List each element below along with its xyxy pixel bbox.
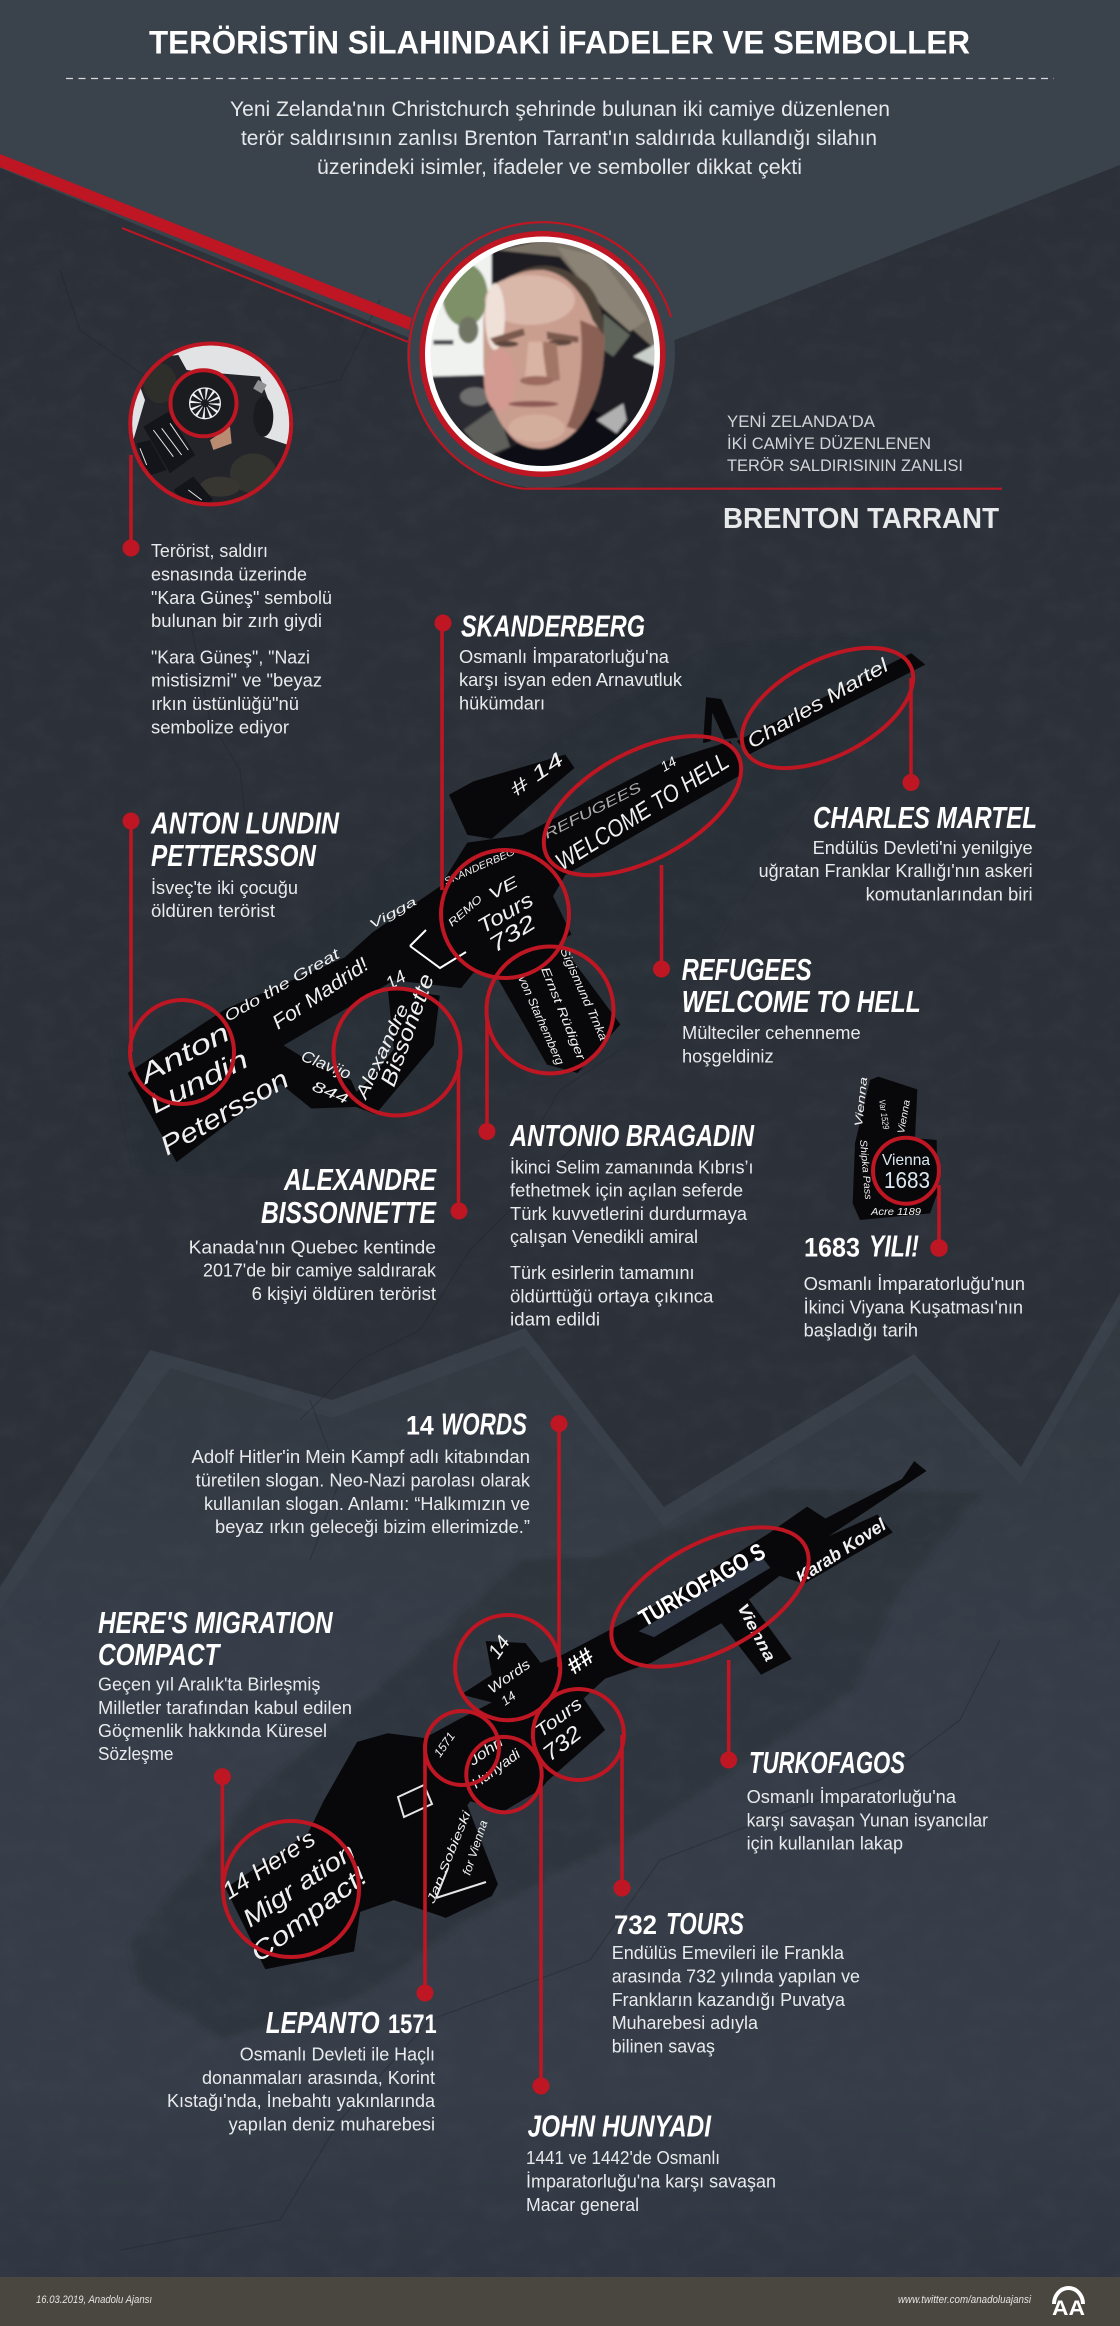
suspect caption	[727, 412, 963, 475]
marker: Tours 732	[533, 1689, 624, 1780]
rifle magazine: 1683	[884, 1167, 930, 1193]
lower rifle inscriptions: John	[465, 1734, 506, 1770]
rifle inscriptions: Clavijo	[299, 1048, 353, 1083]
callout: Anton Lundin Pettersson: İsveç'te iki çocuğu	[151, 878, 298, 898]
rifle inscriptions: VE	[486, 874, 522, 904]
background: wall cracks	[60, 270, 1000, 2250]
callout: Anton Lundin Pettersson: öldüren terörist	[151, 901, 275, 921]
marker: 14 Words	[455, 1615, 560, 1720]
rifle inscriptions: Anton	[132, 1017, 234, 1091]
callout: Alexandre Bissonnette: 6 kişiyi öldüren terörist	[252, 1284, 436, 1304]
rifle inscriptions: # 14	[506, 749, 568, 801]
callout: Antonio Bragadin: fethetmek için açılan seferde	[510, 1181, 743, 1201]
marker: Lepanto	[425, 1711, 499, 1785]
callout: Lepanto 1571: Osmanlı Devleti ile Haçlı	[240, 2045, 435, 2065]
red diagonal bar	[0, 154, 412, 331]
callout: Antonio Bragadin: idam edildi	[510, 1310, 600, 1330]
callout: Lepanto 1571: Kıstağı'nda, İnebahtı yakınlarında	[167, 2091, 436, 2111]
callout: 732 Tours: 732	[614, 1910, 657, 1940]
callout: Charles Martel: Endülüs Devleti'ni yenilgiye	[813, 838, 1033, 858]
intro text: üzerindeki isimler, ifadeler ve semboller dikkat çekti	[317, 156, 802, 179]
background: brush stroke behind lower rifle	[131, 1489, 982, 2038]
intro text: Yeni Zelanda'nın Christchurch şehrinde bulunan iki camiye düzenlenen	[230, 98, 890, 121]
callout: 1683 Yılı: 1683	[804, 1233, 860, 1263]
callout: 14 Words: 14	[406, 1410, 434, 1440]
rifle inscriptions: Vigga	[367, 894, 419, 932]
lower rifle inscriptions: for Vienna	[460, 1818, 491, 1877]
callout: 1683 Yılı: İkinci Viyana Kuşatması'nın	[804, 1297, 1023, 1317]
upper rifle	[128, 623, 932, 1162]
callout: Here's Migration Compact	[98, 1605, 352, 1889]
rifle inscriptions: For Madrid!	[268, 954, 373, 1034]
suspect caption: İKİ CAMİYE DÜZENLENEN	[727, 434, 931, 453]
callout: Lepanto 1571: donanmaları arasında, Korint	[202, 2068, 435, 2088]
rifle inscriptions: 14	[658, 753, 679, 775]
callout: Charles Martel: CHARLES MARTEL	[813, 800, 1037, 835]
marker: Migration Compact	[223, 1821, 359, 1957]
callout: Alexandre Bissonnette: BISSONNETTE	[261, 1195, 437, 1230]
lower rifle inscriptions: Tours	[531, 1693, 586, 1741]
rifle inscriptions: 14	[382, 966, 409, 993]
callout: 732 Tours: Muharebesi adıyla	[612, 2013, 759, 2033]
footer social link: www.twitter.com/anadoluajansi	[898, 2294, 1031, 2306]
portrait halo	[407, 220, 675, 488]
callout: Turkofagos: Osmanlı İmparatorluğu'na	[747, 1787, 957, 1807]
rifle inscriptions: REMO	[446, 893, 485, 929]
callout: Here's Migration Compact: HERE'S MIGRATION	[98, 1605, 333, 1640]
callout: 732 Tours: arasında 732 yılında yapılan ve	[612, 1967, 860, 1987]
callout: 1683 Yılı: YILI!	[869, 1229, 919, 1264]
lower rifle inscriptions: Migr ation	[238, 1838, 360, 1933]
rifle inscriptions: 844	[310, 1078, 351, 1108]
callout: 14 Words: kullanılan slogan. Anlamı: “Halkımızın ve	[204, 1494, 530, 1514]
rifle magazine	[853, 1076, 939, 1220]
text: black sun note: mistisizmi" ve "beyaz	[151, 670, 322, 690]
text: black sun note: sembolize ediyor	[151, 718, 289, 738]
intro text: terör saldırısının zanlısı Brenton Tarrant'ın saldırıda kullandığı silahın	[241, 127, 877, 150]
lower rifle inscriptions: Karab Kovel	[792, 1514, 890, 1587]
rifle inscriptions: WELCOME TO HELL	[551, 748, 734, 876]
callout: 732 Tours: bilinen savaş	[612, 2037, 715, 2057]
lower rifle inscriptions: Jan Sobieski	[423, 1809, 474, 1906]
suspect caption: YENİ ZELANDA'DA	[727, 412, 876, 431]
callout: Here's Migration Compact: COMPACT	[98, 1637, 222, 1672]
rifle inscriptions: Tours	[474, 888, 538, 938]
callout: John Hunyadi: Macar general	[526, 2195, 639, 2215]
callout: 14 Words: türetilen slogan. Neo-Nazi parolası olarak	[196, 1470, 531, 1490]
callout: Refugees Welcome to Hell: Mülteciler cehenneme	[682, 1023, 861, 1043]
text: black sun note: ırkın üstünlüğü"nü	[151, 694, 299, 714]
callout: Antonio Bragadin: Türk esirlerin tamamını	[510, 1263, 694, 1283]
rifle magazine: Acre 1189	[870, 1207, 921, 1218]
callout: 732 Tours	[612, 1735, 860, 2057]
rifle inscriptions: Sigismund Trnka	[557, 946, 611, 1043]
rifle inscriptions: Petersson	[155, 1064, 294, 1161]
callout: 1683 Yılı: başladığı tarih	[804, 1321, 918, 1341]
title: TERÖRİSTİN SİLAHINDAKİ İFADELER VE SEMBOLLER	[149, 24, 970, 60]
text: black sun note	[151, 541, 332, 738]
rifle inscriptions: Lundin	[144, 1044, 253, 1119]
callout: Antonio Bragadin	[478, 1020, 754, 1330]
rifle inscriptions: Odo the Great	[222, 945, 344, 1025]
lower rifle	[218, 1461, 926, 1969]
callout: Charles Martel	[759, 678, 1037, 904]
callout: Here's Migration Compact: Göçmenlik hakkında Küresel	[98, 1721, 327, 1741]
lower rifle inscriptions: 732	[538, 1720, 586, 1766]
callout: Antonio Bragadin: Türk kuvvetlerini durdurmaya	[510, 1204, 748, 1224]
rifle inscriptions: Ernst Rüdiger	[538, 965, 589, 1063]
callout: Charles Martel: uğratan Franklar Krallığı'nın askeri	[759, 861, 1033, 881]
callout: Alexandre Bissonnette: Kanada'nın Quebec kentinde	[189, 1237, 436, 1257]
lower rifle inscriptions: TURKOFAGO S	[634, 1538, 770, 1632]
connector: armour note	[122, 455, 140, 556]
callout: 14 Words: beyaz ırkın geleceği bizim ellerimizde.”	[215, 1517, 530, 1537]
portrait arc and underline	[409, 222, 1002, 489]
lower rifle inscriptions: Words	[485, 1656, 533, 1696]
lower rifle inscriptions: 14	[484, 1632, 515, 1663]
callout: Anton Lundin Pettersson	[122, 806, 339, 1052]
callout: 14 Words	[192, 1406, 568, 1667]
icon: agency logo: AA	[1052, 2297, 1085, 2320]
callout: Lepanto 1571	[167, 1750, 437, 2135]
marker: John Hunyadi	[466, 1737, 542, 1812]
callout: Alexandre Bissonnette: 2017'de bir camiye saldırarak	[203, 1261, 437, 1281]
rifle magazine: Var 1529	[877, 1099, 891, 1130]
background: brush stroke behind upper rifle	[112, 628, 945, 1176]
text: black sun note: "Kara Güneş", "Nazi	[151, 648, 310, 668]
footer bar	[0, 2277, 1120, 2326]
rifle magazine: Shipka Pass	[857, 1139, 873, 1200]
callout: John Hunyadi: 1441 ve 1442'de Osmanlı	[526, 2148, 720, 2168]
title divider	[66, 78, 1054, 80]
callout: Skanderberg: hükümdarı	[459, 694, 545, 714]
footer date and source: 16.03.2019, Anadolu Ajansı	[36, 2294, 152, 2306]
callout: John Hunyadi: İmparatorluğu'na karşı savaşan	[526, 2172, 776, 2192]
callout: Skanderberg	[434, 608, 683, 890]
callout: Skanderberg: SKANDERBERG	[461, 608, 645, 644]
callout: Lepanto 1571: LEPANTO	[266, 2005, 380, 2040]
callout: Turkofagos: karşı savaşan Yunan isyancılar	[747, 1810, 988, 1830]
photo: armour with black sun patch	[127, 340, 293, 510]
marker: Refugees Welcome	[522, 707, 763, 904]
callout: John Hunyadi	[526, 1780, 776, 2215]
rifle magazine: Vienna	[853, 1076, 870, 1127]
callout: Antonio Bragadin: ANTONIO BRAGADIN	[509, 1118, 754, 1153]
suspect name: BRENTON TARRANT	[723, 503, 999, 535]
callout: 1683 Yılı: Osmanlı İmparatorluğu'nun	[804, 1274, 1025, 1294]
rifle inscriptions: Charles Martel	[744, 654, 893, 753]
lower rifle inscriptions: Compact!	[245, 1861, 373, 1968]
rifle magazine: Vienna	[882, 1152, 930, 1169]
rifle magazine: Vienna	[896, 1099, 913, 1135]
callout: 732 Tours: Endülüs Emevileri ile Frankla	[612, 1943, 845, 1963]
rifle inscriptions	[132, 654, 893, 1161]
rifle inscriptions: von Starhemberg	[515, 974, 567, 1067]
text: black sun note: bulunan bir zırh giydi	[151, 611, 322, 631]
callout: John Hunyadi: JOHN HUNYADI	[528, 2109, 712, 2144]
callout: Refugees Welcome to Hell: WELCOME TO HELL	[682, 984, 921, 1019]
background: lower mountain silhouette	[0, 1293, 1120, 2277]
callout: Antonio Bragadin: İkinci Selim zamanında Kıbrıs’ı	[510, 1157, 753, 1177]
portrait: Brenton Tarrant	[420, 231, 666, 477]
rifle inscriptions: SKANDERBEG	[443, 847, 517, 888]
lower rifle inscriptions: Hunyadi	[468, 1745, 524, 1791]
callout: 14 Words: WORDS	[441, 1406, 527, 1442]
callout: Anton Lundin Pettersson: PETTERSSON	[151, 838, 316, 873]
callout: Here's Migration Compact: Sözleşme	[98, 1744, 174, 1764]
rifle inscriptions: REFUGEES	[541, 778, 645, 842]
marker: Remo Tours 732	[441, 850, 569, 978]
black sun symbol	[172, 372, 235, 435]
lower rifle inscriptions: ##	[562, 1642, 599, 1680]
lower rifle inscriptions: 14 Here's	[218, 1825, 320, 1905]
callout: Antonio Bragadin: çalışan Venedikli amiral	[510, 1227, 698, 1247]
marker: Bragadin	[486, 946, 614, 1074]
callout: Refugees Welcome to Hell: hoşgeldiniz	[682, 1046, 774, 1066]
callout: 1683 Yılı	[804, 1185, 1025, 1341]
callout: Here's Migration Compact: Milletler tarafından kabul edilen	[98, 1698, 352, 1718]
lower rifle inscriptions	[218, 1514, 890, 1968]
icon: agency logo	[1052, 2288, 1085, 2320]
callout: Refugees Welcome to Hell	[653, 865, 921, 1066]
rifle inscriptions: Alexandre	[351, 1001, 413, 1103]
intro text	[230, 98, 890, 179]
callout: Turkofagos: için kullanılan lakap	[747, 1834, 903, 1854]
suspect caption: TERÖR SALDIRISININ ZANLISI	[727, 456, 963, 475]
marker: Bissonnette	[334, 988, 460, 1116]
callout: Alexandre Bissonnette: ALEXANDRE	[283, 1162, 437, 1197]
callout: Here's Migration Compact: Geçen yıl Aralık'ta Birleşmiş	[98, 1674, 320, 1694]
callout: 732 Tours: TOURS	[666, 1906, 744, 1941]
callout: Lepanto 1571: yapılan deniz muharebesi	[229, 2115, 435, 2135]
callout: Skanderberg: Osmanlı İmparatorluğu'na	[459, 647, 670, 667]
rifle inscriptions: Bissonette	[375, 970, 439, 1090]
callout: Anton Lundin Pettersson: ANTON LUNDIN	[150, 806, 339, 840]
callout: 732 Tours: Frankların kazandığı Puvatya	[612, 1990, 846, 2010]
callout: Refugees Welcome to Hell: REFUGEES	[682, 952, 812, 987]
rifle inscriptions: 732	[484, 910, 540, 957]
lower rifle inscriptions: 14	[498, 1688, 519, 1708]
callout: Alexandre Bissonnette	[189, 1060, 468, 1304]
text: black sun note: Terörist, saldırı	[151, 541, 268, 561]
marker: Charles Martel	[723, 623, 932, 793]
callout: Turkofagos	[720, 1660, 988, 1854]
callout: Lepanto 1571: 1571	[388, 2009, 437, 2039]
lower rifle inscriptions: Vienna	[733, 1601, 778, 1665]
callout: Charles Martel: komutanlarından biri	[866, 884, 1033, 904]
thin red diagonal line	[122, 228, 408, 342]
marker: Turkofagos	[589, 1499, 831, 1695]
marker: Anton Lundin	[130, 1000, 234, 1104]
text: black sun note: esnasında üzerinde	[151, 564, 307, 584]
callout: Antonio Bragadin: öldürttüğü ortaya çıkınca	[510, 1286, 714, 1306]
lower rifle inscriptions: 1571	[431, 1730, 458, 1760]
callout: 14 Words: Adolf Hitler'in Mein Kampf adlı kitabından	[192, 1447, 530, 1467]
callout: Skanderberg: karşı isyan eden Arnavutluk	[459, 670, 683, 690]
callout: Turkofagos: TURKOFAGOS	[749, 1745, 905, 1780]
text: black sun note: "Kara Güneş" sembolü	[151, 588, 332, 608]
